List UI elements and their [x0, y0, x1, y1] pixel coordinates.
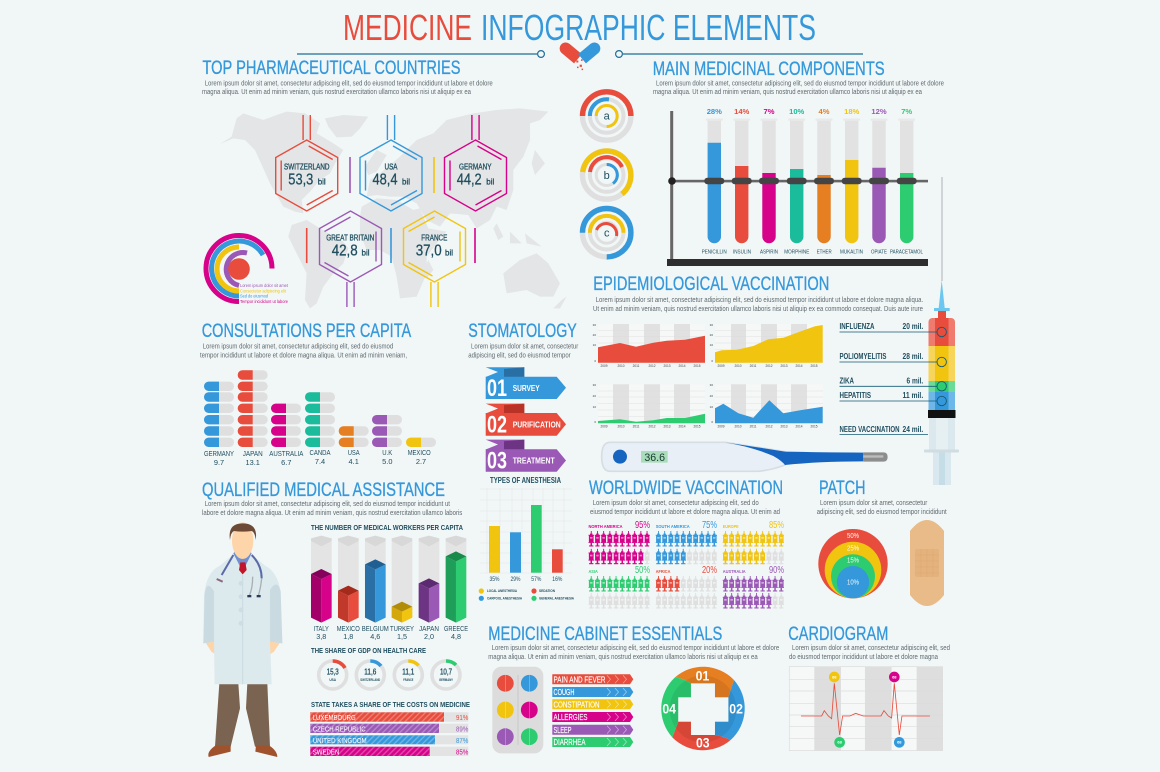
test tubes chart: 18%	[844, 107, 860, 116]
area chart: yellow: 2013	[780, 364, 788, 368]
heading: TYPES OF ANESTHESIA	[490, 476, 561, 485]
pill chart: 5.0	[382, 457, 392, 466]
legend: SEDATION	[539, 589, 555, 593]
banner 02: 02	[487, 412, 507, 438]
area chart: yellow: 10	[710, 343, 713, 347]
area chart: green: 2012	[648, 424, 656, 428]
hexagon: great britain: 42,8	[332, 242, 358, 260]
hexagon: germany: bil	[486, 176, 494, 186]
sub-heading: THE NUMBER OF MEDICAL WORKERS PER CAPITA	[311, 523, 463, 532]
pictogram: south america	[656, 520, 717, 564]
test tubes chart: INSULIN	[733, 250, 751, 256]
area chart: green: 2011	[633, 424, 640, 428]
ring chart c: c	[604, 228, 610, 240]
pictogram: north america	[588, 520, 650, 564]
hexagon: great britain: GREAT BRITAIN	[326, 234, 374, 242]
title: INFOGRAPHIC ELEMENTS	[481, 7, 816, 48]
3d bar chart: JAPAN	[419, 624, 439, 633]
area chart: blue: 30	[710, 383, 713, 387]
title rule right	[616, 51, 863, 57]
panel: main medicinal components	[582, 59, 944, 266]
heading: CONSULTATIONS PER CAPITA	[202, 321, 411, 342]
3d bar chart: MEXICO	[337, 624, 360, 633]
heading: STOMATOLOGY	[468, 321, 577, 342]
heading: WORLDWIDE VACCINATION	[589, 478, 783, 499]
ecg chart: 68	[897, 740, 902, 745]
text block: Lorem ipsum dolor sit amet, consectetur adipiscing elit, sed do eiusmod	[203, 343, 393, 350]
area chart: red: 30	[593, 323, 596, 327]
arrow list: DIARRHEA	[554, 738, 586, 747]
nested circles chart: 25%	[847, 544, 859, 552]
icon: thermometer: 36.6	[644, 452, 665, 464]
icon: thermometer	[602, 442, 888, 471]
panel: qualified medical assistance	[202, 480, 470, 757]
circular cross diagram: 02	[729, 700, 743, 716]
pill chart: 6.7	[281, 458, 291, 467]
donut: germany	[432, 661, 460, 689]
text block	[202, 501, 463, 517]
heading: MEDICINE CABINET ESSENTIALS	[488, 624, 722, 645]
area chart: red: 2009	[600, 364, 608, 368]
pill chart: 4.1	[349, 457, 359, 466]
area chart: red: 0	[594, 359, 596, 363]
area chart: blue: 2011	[750, 424, 757, 428]
pictogram: europe	[723, 520, 784, 564]
text block	[789, 645, 950, 661]
area chart: blue	[710, 383, 823, 428]
area chart: yellow: 30	[710, 323, 713, 327]
donut: switzerland	[356, 661, 384, 689]
pictogram: africa: AFRICA	[656, 569, 671, 574]
hexagon: france: bil	[445, 248, 453, 258]
text block: Lorem ipsum dolor sit amet, consectetur adipiscing elit, sed do	[593, 500, 759, 507]
pill chart: USA	[348, 448, 360, 457]
hexagon: germany: GERMANY	[459, 162, 492, 172]
pill chart: 9.7	[214, 458, 224, 467]
ring chart b	[582, 151, 631, 199]
banner 03: 03	[487, 448, 507, 474]
icon: blister pack	[492, 667, 543, 753]
text block	[653, 80, 944, 96]
donut: switzerland: 11,6	[364, 668, 377, 676]
striped bars: SWEDEN	[313, 747, 339, 756]
panel: patch	[817, 478, 947, 606]
hexagon: great britain: bil	[362, 248, 370, 258]
area chart: yellow: 0	[711, 359, 713, 363]
pictogram: africa: 20%	[702, 565, 717, 576]
donut: germany: GERMANY	[439, 678, 454, 682]
striped bars: 91%	[456, 713, 468, 722]
area chart: green: 20	[593, 394, 596, 398]
text block	[590, 500, 780, 516]
area chart: yellow: 2012	[765, 364, 773, 368]
banner 01: SURVEY	[513, 384, 540, 393]
area chart: green: 2010	[617, 424, 625, 428]
syringe legend: 28 mil.	[902, 352, 923, 361]
text block	[468, 343, 579, 359]
nested circles chart: 10%	[847, 578, 859, 586]
heading: QUALIFIED MEDICAL ASSISTANCE	[202, 480, 445, 501]
ring chart b: b	[604, 170, 610, 182]
test tubes chart: OPIATE	[871, 250, 887, 256]
bar chart: 35%	[490, 576, 500, 583]
hexagon: usa	[360, 115, 422, 211]
radial chart: Consectetur adipiscing elit	[240, 288, 287, 293]
pill chart: JAPAN	[243, 449, 263, 458]
area chart: yellow	[710, 323, 823, 368]
bar chart: 29%	[510, 576, 521, 583]
ecg chart: 68	[892, 674, 897, 679]
donut: france	[394, 661, 422, 689]
3d bar chart: TURKEY	[390, 624, 414, 633]
area chart: red: 10	[593, 343, 596, 347]
hexagon: switzerland: 53,3	[288, 172, 313, 188]
text block	[593, 297, 923, 313]
text block: Lorem ipsum dolor sit amet, consectetur adipiscing elit, sed	[792, 645, 950, 652]
area chart: green: 2013	[663, 424, 671, 428]
circular cross diagram: 04	[662, 700, 676, 716]
pictogram: asia: ASIA	[588, 569, 598, 574]
test tubes chart: PARACETAMOL	[890, 250, 923, 256]
pill chart: U.K	[382, 448, 392, 457]
syringe legend: 6 mil.	[906, 376, 923, 386]
ring chart a	[582, 92, 631, 140]
pictogram: australia: AUSTRALIA	[723, 569, 746, 574]
test tubes chart: PENICILLIN	[702, 250, 727, 256]
ecg chart	[789, 667, 943, 751]
area chart: green: 0	[594, 420, 596, 424]
heading: MAIN MEDICINAL COMPONENTS	[653, 59, 885, 80]
text block: do eiusmod tempor incididunt ut labore et dolore magna	[789, 654, 938, 661]
3d bar chart: 1,8	[343, 632, 353, 641]
banner 01	[486, 367, 566, 402]
pictogram: africa	[656, 565, 717, 608]
hexagon: switzerland: SWITZERLAND	[284, 162, 330, 172]
pill chart: AUSTRALIA	[269, 449, 303, 458]
banner 02: PURIFICATION	[513, 420, 561, 430]
syringe legend: 24 mil.	[902, 425, 923, 434]
test tubes chart: ETHER	[817, 250, 832, 256]
bar chart: 16%	[552, 576, 563, 583]
text block: Ut enim ad minim veniam, quis nostrud exercitation ullamco laboris nisi ut aliquip ex ea commodo consequat. Duis aute irure	[593, 306, 923, 313]
arrow list: COUGH	[554, 688, 575, 697]
arrow list	[552, 674, 633, 747]
area chart: green	[593, 383, 705, 428]
syringe legend	[840, 322, 937, 434]
legend: GENERAL ANESTHESIA	[539, 596, 574, 600]
hexagon: switzerland	[276, 115, 338, 211]
nested circles chart: 15%	[847, 556, 859, 564]
radial chart: Lorem ipsum dolor sit amet	[240, 283, 289, 288]
3d bar chart: 2,0	[424, 632, 434, 641]
pill chart: 13.1	[246, 458, 260, 467]
area chart: yellow: 20	[710, 333, 713, 337]
area chart: yellow: 2014	[795, 364, 803, 368]
text block: adipiscing elit, sed do eiusmod tempor incididunt	[817, 509, 947, 516]
banner 03: TREATMENT	[513, 456, 555, 466]
ecg chart: 68	[837, 740, 843, 745]
text block: labore et dolore magna aliqua. Ut enim ad minim veniam, quis nostrud exercitation ullamco laboris	[202, 510, 463, 517]
striped bars: 85%	[456, 747, 468, 756]
test tubes chart	[702, 107, 923, 256]
test tubes chart: 14%	[734, 107, 750, 116]
text block: adipiscing elit, sed do eiusmod tempor	[468, 352, 571, 359]
pictogram: asia: 50%	[635, 565, 650, 576]
text block: Lorem ipsum dolor sit amet, consectetur adipiscing elit, sed do eiusmod tempor incididunt ut	[205, 501, 450, 508]
sub-heading: STATE TAKES A SHARE OF THE COSTS ON MEDICINE	[311, 700, 470, 709]
area chart: blue: 2013	[780, 424, 788, 428]
test tubes chart: MUKALTIN	[840, 250, 863, 256]
pill chart: CANDA	[310, 448, 331, 457]
area chart: green: 10	[593, 405, 596, 409]
pictogram: asia	[588, 565, 650, 608]
syringe legend: ZIKA	[840, 376, 854, 386]
text block: Lorem ipsum dolor sit amet, consectetur adipiscing elit, sed do eiusmod tempor incididunt ut labore et dolore	[492, 645, 779, 652]
pill chart: 7.4	[315, 457, 325, 466]
3d bar chart: ITALY	[314, 624, 329, 633]
syringe legend: 11 mil.	[902, 391, 923, 400]
hexagon: usa: USA	[384, 162, 398, 172]
test tubes chart: 12%	[871, 107, 887, 116]
syringe legend: HEPATITIS	[840, 391, 871, 400]
hexagon: france: FRANCE	[421, 234, 447, 242]
arrow list: ALLERGIES	[554, 713, 588, 722]
panel: top pharmaceutical countries	[202, 58, 567, 308]
striped bars: UNITED KINGDOM	[313, 736, 367, 745]
panel: worldwide vaccination	[588, 478, 784, 608]
3d bar chart: 4,6	[370, 632, 380, 641]
panel: cardiogram	[788, 624, 950, 751]
text block	[200, 343, 407, 359]
heading: EPIDEMIOLOGICAL VACCINATION	[593, 274, 829, 295]
text block: Lorem ipsum dolor sit amet, consectetur adipiscing elit, sed do eiusmod tempor incididunt ut labore et dolore magna aliqua.	[596, 297, 923, 304]
circular cross diagram	[661, 667, 745, 751]
ecg chart: 68	[832, 674, 837, 679]
pictogram: australia: 90%	[769, 565, 784, 576]
ring chart c	[582, 208, 631, 257]
donut: france: 11,1	[402, 668, 415, 676]
donut: france: FRANCE	[403, 678, 413, 682]
area chart: red: 20	[593, 333, 596, 337]
text block: Lorem ipsum dolor sit amet, consectetur adipiscing elit, sed do eiusmod tempor incididunt ut labore et dolore	[205, 80, 493, 88]
test tubes chart: 28%	[707, 107, 722, 116]
area chart: yellow: 2011	[750, 364, 757, 368]
illustration: doctor	[203, 522, 282, 757]
banner 02	[486, 404, 566, 438]
nested circles chart: 50%	[847, 531, 859, 540]
panel: types of anesthesia	[479, 476, 574, 601]
area chart: blue: 0	[711, 420, 713, 424]
icon: syringe	[924, 177, 959, 485]
donut: germany: 10,7	[440, 668, 452, 676]
legend	[479, 588, 574, 601]
area chart: blue: 20	[710, 394, 713, 398]
3d bar chart: 1,5	[397, 632, 407, 641]
hexagon: france: 37,0	[416, 242, 442, 260]
heading: PATCH	[819, 478, 866, 499]
pictogram: north america: NORTH AMERICA	[588, 524, 623, 529]
donut: usa: 15,3	[327, 668, 339, 676]
test tubes chart: MORPHINE	[784, 250, 810, 256]
text block: magna aliqua. Ut enim ad minim veniam, quis nostrud exercitation ullamco laboris nisi ut aliquip ex ea	[202, 89, 471, 96]
panel: consultations per capita	[200, 321, 436, 467]
text block: Lorem ipsum dolor sit amet, consectetur	[471, 343, 579, 350]
syringe legend: POLIOMYELITIS	[840, 352, 886, 361]
area chart: blue: 2014	[795, 424, 803, 428]
text block	[488, 645, 779, 661]
pictogram: north america: 95%	[635, 520, 650, 531]
area chart: blue: 2012	[765, 424, 773, 428]
arrow list: SLEEP	[554, 726, 572, 735]
title	[343, 7, 816, 48]
hexagon: germany	[444, 115, 506, 211]
arrow list: CONSTIPATION	[554, 700, 600, 710]
striped bars: 87%	[456, 736, 468, 745]
legend: LOCAL ANESTHESIA	[487, 589, 517, 593]
pill chart: MEXICO	[408, 448, 431, 457]
3d bar chart: GREECE	[444, 624, 468, 633]
panel: medicine cabinet essentials	[488, 624, 779, 753]
area chart: red	[593, 323, 705, 368]
test tubes chart: 7%	[901, 107, 912, 116]
pill chart: 2.7	[416, 457, 426, 466]
area chart: yellow: 2010	[734, 364, 742, 368]
hexagon: usa: bil	[402, 176, 410, 186]
icon: bandage	[910, 520, 944, 606]
donut: usa: USA	[329, 678, 337, 682]
area chart: red: 2014	[678, 364, 686, 368]
pictogram: australia	[723, 565, 784, 608]
text block: magna aliqua. Ut enim ad minim veniam, quis nostrud exercitation ullamco laboris nisi ut aliquip ex ea	[488, 654, 758, 661]
syringe legend: 20 mil.	[902, 322, 923, 331]
striped bars: LUXEMBOURG	[313, 713, 356, 722]
test tubes chart: 4%	[819, 107, 830, 116]
ring chart a: a	[604, 110, 611, 122]
area chart: yellow: 2009	[717, 364, 725, 368]
area chart: blue: 2015	[810, 424, 818, 428]
area chart: blue: 2010	[734, 424, 742, 428]
arrow list: PAIN AND FEVER	[554, 676, 606, 684]
heading: CARDIOGRAM	[788, 624, 888, 645]
panel: stomatology	[468, 321, 579, 474]
3d bar chart: 4,8	[451, 632, 461, 641]
hexagon: usa: 48,4	[372, 172, 398, 188]
pill chart	[204, 370, 436, 467]
syringe legend: NEED VACCINATION	[840, 425, 900, 434]
text block: Lorem ipsum dolor sit amet, consectetur	[820, 500, 928, 507]
legend: CARPOOL ANESTHESIA	[487, 596, 522, 600]
hexagon: great britain	[320, 211, 382, 307]
striped bars: CZECH REPUBLIC	[313, 724, 366, 733]
area chart: red: 2010	[617, 364, 625, 368]
panel: epidemiological vaccination	[593, 177, 959, 485]
area chart: red: 2015	[693, 364, 701, 368]
area chart: yellow: 2015	[810, 364, 818, 368]
area chart: red: 2011	[633, 364, 640, 368]
radial chart	[206, 236, 289, 304]
banner 03	[486, 440, 566, 474]
test tubes chart: 7%	[764, 107, 775, 116]
area chart: green: 2014	[678, 424, 686, 428]
heading: TOP PHARMACEUTICAL COUNTRIES	[202, 58, 460, 79]
icon: capsule	[557, 40, 603, 70]
area chart: red: 2012	[648, 364, 656, 368]
hexagon: switzerland: bil	[318, 176, 326, 186]
pictogram: south america: 75%	[702, 520, 717, 531]
pictogram: europe: 85%	[769, 520, 784, 531]
text block: magna aliqua. Ut enim ad minim veniam, quis nostrud exercitation ullamco laboris nisi ut aliquip ex ea	[653, 89, 922, 96]
syringe legend: INFLUENZA	[840, 322, 875, 331]
title rule left	[297, 51, 544, 57]
test tubes chart: ASPIRIN	[760, 250, 778, 256]
3d bar chart: BELGIUM	[362, 624, 389, 633]
circular cross diagram: 03	[696, 735, 710, 751]
nested circles chart	[818, 529, 888, 598]
3d bar chart	[311, 536, 468, 641]
3d bar chart: 3,8	[316, 632, 326, 641]
hexagon: germany: 44,2	[457, 172, 482, 188]
bar chart	[480, 488, 572, 583]
text block	[202, 80, 493, 96]
striped bars	[310, 712, 468, 756]
circular cross diagram: 01	[696, 668, 709, 684]
area chart: blue: 10	[710, 405, 713, 409]
pill chart: GERMANY	[204, 449, 234, 458]
world map	[220, 108, 567, 308]
banner 01: 01	[487, 375, 507, 402]
area chart: blue: 2009	[717, 424, 725, 428]
area chart: green: 2015	[693, 424, 701, 428]
title: MEDICINE	[343, 7, 472, 48]
text block	[817, 500, 947, 516]
test tubes chart: 10%	[789, 107, 805, 116]
area chart: red: 2013	[663, 364, 671, 368]
text block: tempor incididunt ut labore et dolore magna aliqua. Ut enim ad minim veniam,	[200, 352, 407, 359]
pictogram: europe: EUROPE	[723, 524, 739, 529]
sub-heading: THE SHARE OF GDP ON HEALTH CARE	[311, 646, 426, 655]
text block: eiusmod tempor incididunt ut labore et dolore magna aliqua. Ut enim ad	[590, 509, 780, 516]
test tube stand	[667, 111, 928, 266]
text block: Lorem ipsum dolor sit amet, consectetur adipiscing elit, sed do eiusmod tempor incididunt ut labore et dolore	[656, 80, 944, 88]
area chart: green: 30	[593, 383, 596, 387]
pictogram: south america: SOUTH AMERICA	[656, 524, 690, 529]
striped bars: 89%	[456, 724, 468, 733]
donut: switzerland: SWITZERLAND	[360, 678, 381, 682]
bar chart: 57%	[531, 576, 542, 583]
hexagon: france	[404, 211, 466, 307]
donut: usa	[319, 661, 347, 689]
radial chart: Sed do eiusmod	[240, 294, 268, 299]
radial chart: Tempor incididunt ut labore	[240, 299, 289, 304]
area chart: green: 2009	[600, 424, 608, 428]
